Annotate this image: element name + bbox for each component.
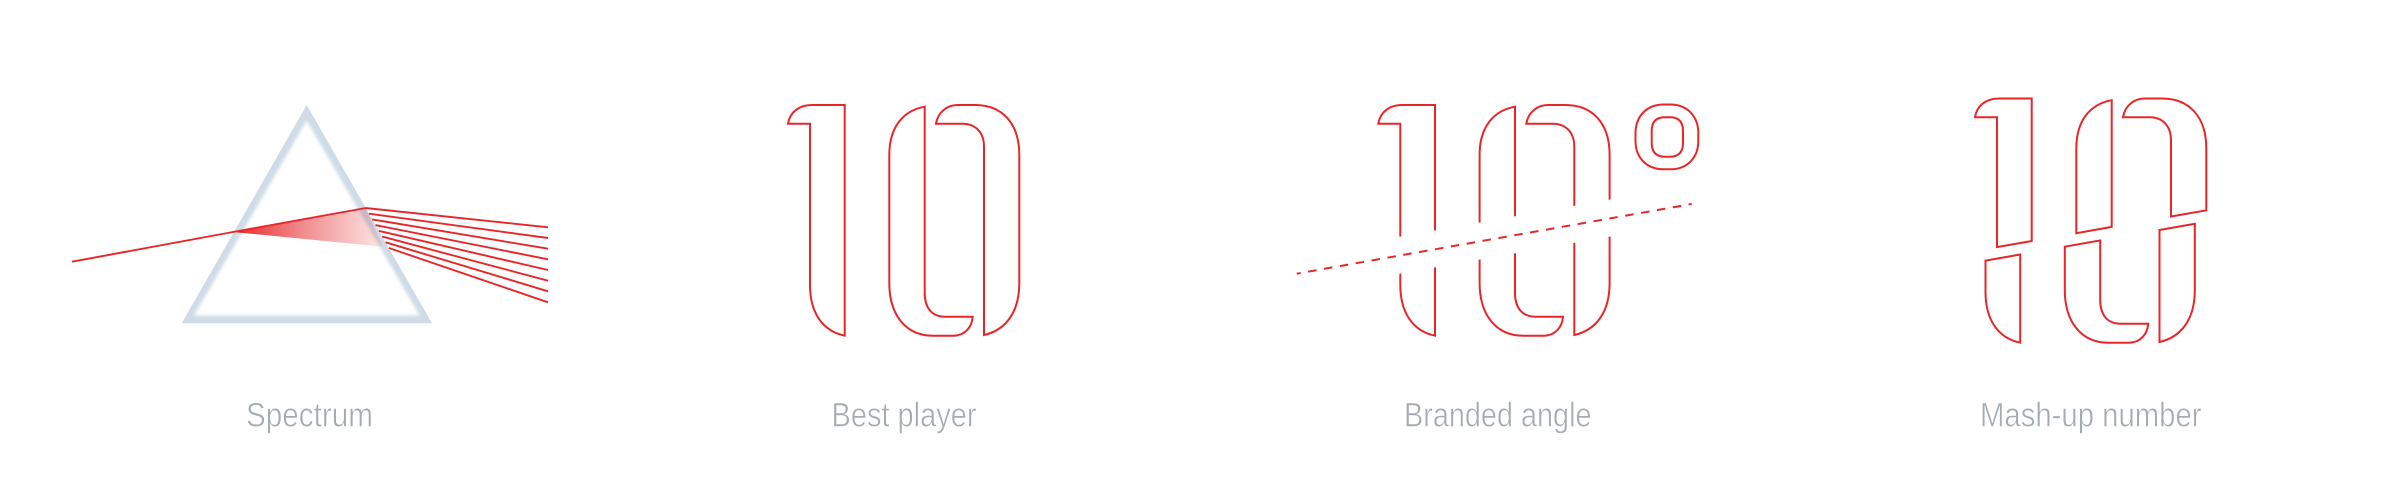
- panel: branded angle number 10 degrees: [1297, 104, 1698, 336]
- label: Spectrum: Spectrum: [246, 397, 373, 435]
- digit 0 right part: [936, 105, 1019, 335]
- incoming light ray: [72, 208, 366, 262]
- dispersed rays: [366, 208, 548, 302]
- panel: best player number 10: [788, 105, 1019, 336]
- upper pieces: [1975, 98, 2206, 247]
- cut number 10: [1378, 105, 1610, 336]
- lower pieces: [1986, 224, 2195, 343]
- dashed angle line: [1297, 204, 1692, 274]
- gradient light wedge inside prism: [233, 208, 383, 247]
- digit 1 outline: [788, 105, 845, 336]
- label: Mash-up number: Mash-up number: [1980, 397, 2202, 435]
- label: Branded angle: Branded angle: [1404, 397, 1592, 435]
- prism triangle: [182, 105, 432, 324]
- digit 0 left part: [889, 107, 973, 336]
- label: Best player: Best player: [832, 397, 976, 435]
- panel: mash-up number 10: [1975, 98, 2206, 343]
- panel: spectrum prism: [72, 105, 548, 324]
- degree symbol: [1636, 104, 1698, 169]
